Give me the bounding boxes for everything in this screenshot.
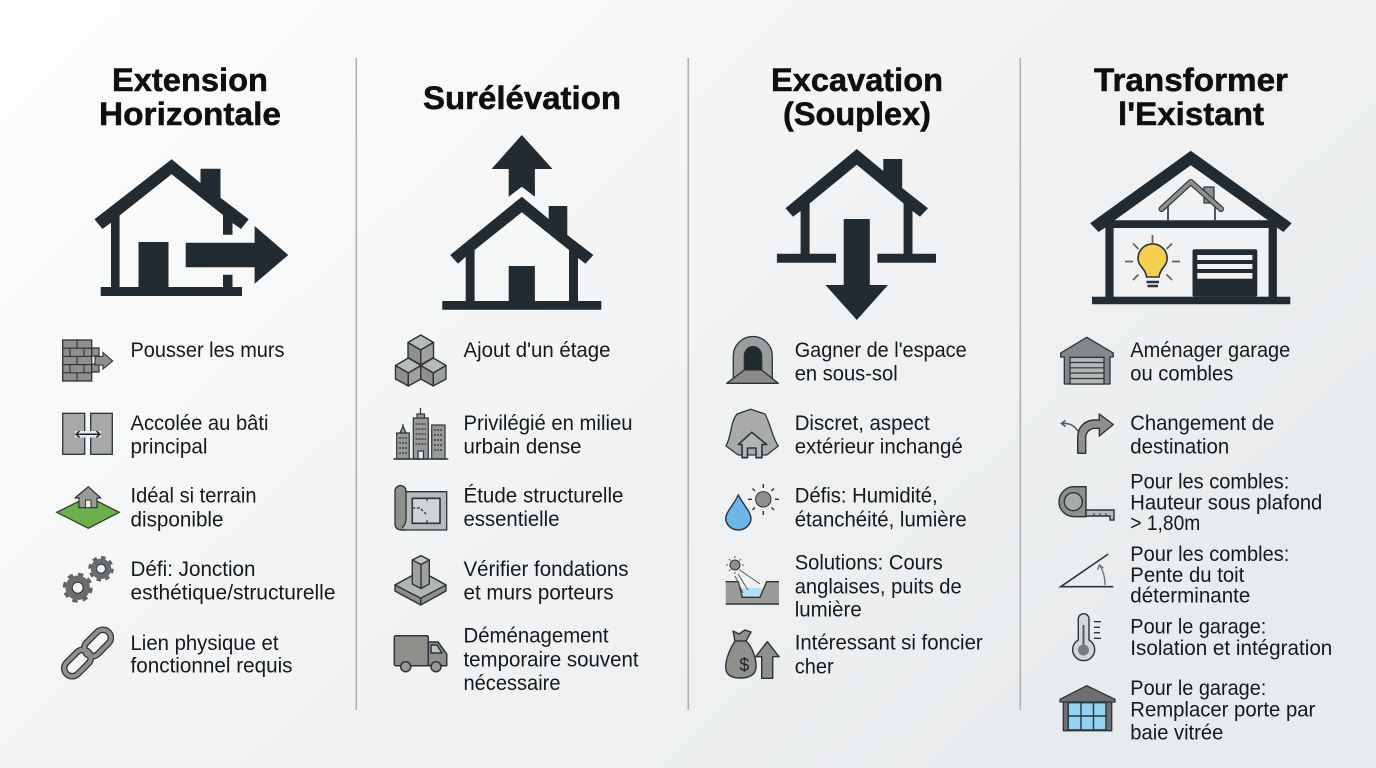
text xyxy=(1130,411,1274,458)
text: essentielle xyxy=(464,507,560,531)
text xyxy=(1130,338,1290,386)
text: étanchéité, lumière xyxy=(795,508,967,532)
heading: Transformer l'Existant xyxy=(1094,62,1288,132)
text xyxy=(1130,676,1315,744)
icon: garage xyxy=(1061,337,1113,384)
text: esthétique/structurelle xyxy=(130,580,336,604)
item: Étude structurelle essentielle xyxy=(395,483,624,531)
panel: Transformer l'Existant xyxy=(1059,62,1332,744)
text: nécessaire xyxy=(464,671,560,695)
text: Gagner de l'espace xyxy=(795,338,967,362)
icon: english court with sun xyxy=(726,556,779,604)
item: Vérifier fondations et murs porteurs xyxy=(395,556,628,605)
icon: chain links xyxy=(61,626,114,680)
icon: small attic house xyxy=(1162,182,1221,220)
text: Remplacer porte par xyxy=(1130,698,1315,722)
panel: Extension Horizontale xyxy=(57,62,335,680)
heading: Transformer l'Existant: l'Existant xyxy=(1118,96,1264,132)
icon: moving truck xyxy=(394,636,447,672)
item: Aménager garage ou combles xyxy=(1061,337,1290,386)
icon: house with up arrow xyxy=(442,135,601,310)
text: Hauteur sous plafond xyxy=(1130,490,1322,514)
text: Pour les combles: xyxy=(1130,469,1289,493)
item: Défis Humidité, étanchéité, lumière xyxy=(726,484,967,532)
icon: house with down arrow xyxy=(777,149,936,320)
house interior xyxy=(475,212,569,301)
text: en sous-sol xyxy=(795,362,898,386)
text xyxy=(795,550,962,622)
text: Pente du toit xyxy=(1130,563,1244,587)
text: Ajout d'un étage xyxy=(464,338,610,362)
icon: garage with glazed bay xyxy=(1060,686,1115,731)
icon: foundation pillar xyxy=(395,556,446,605)
item: Changement de destination xyxy=(1062,411,1274,458)
item: Privilégié en milieu urbain dense xyxy=(393,408,632,459)
icon: money bag with up arrow: $ xyxy=(739,655,749,675)
icon: house with right arrow xyxy=(94,159,288,296)
text: principal xyxy=(130,434,208,458)
text: Pour les combles: xyxy=(1130,542,1289,566)
text: > 1,80m xyxy=(1130,511,1200,535)
text: Déménagement xyxy=(464,624,609,648)
text xyxy=(464,557,628,604)
heading: Surélévation: Surélévation xyxy=(423,80,621,116)
text: et murs porteurs xyxy=(464,580,614,604)
heading: Transformer l'Existant: Transformer xyxy=(1094,62,1288,98)
panel: Surélévation xyxy=(393,80,639,695)
text: cher xyxy=(795,654,834,678)
text: Isolation et intégration xyxy=(1130,636,1332,660)
item: Accolée au bâti principal xyxy=(63,411,269,458)
icon: roof slope angle xyxy=(1061,554,1113,587)
heading: Excavation (Souplex) xyxy=(771,62,943,132)
heading: Extension Horizontale: Extension xyxy=(112,62,268,98)
item: Idéal si terrain disponible xyxy=(57,484,257,532)
text xyxy=(130,557,336,604)
text: Lien physique et xyxy=(130,631,279,655)
text: Pour le garage: xyxy=(1130,676,1266,700)
text: lumière xyxy=(795,598,862,622)
text xyxy=(464,411,632,458)
item: Pour le garage Isolation et intégration xyxy=(1073,614,1332,661)
text xyxy=(130,631,292,678)
text: Vérifier fondations xyxy=(464,557,628,581)
text xyxy=(130,484,256,532)
icon: light bulb xyxy=(1125,235,1180,286)
item: Solutions Cours anglaises, puits de lumière xyxy=(726,550,962,622)
icon: house with attic and garage xyxy=(1090,151,1292,304)
text: Défis: Humidité, xyxy=(795,484,938,508)
text: Pousser les murs xyxy=(130,338,284,362)
item: Déménagement temporaire souvent nécessaire xyxy=(394,624,639,695)
text xyxy=(795,630,983,678)
text xyxy=(795,338,967,386)
item: Gagner de l'espace en sous-sol xyxy=(727,336,967,386)
icon: turning arrow xyxy=(1062,414,1113,453)
text: baie vitrée xyxy=(1130,720,1223,744)
text: Solutions: Cours xyxy=(795,550,943,574)
icon: blueprint xyxy=(395,486,447,530)
text: Accolée au bâti xyxy=(130,411,268,435)
text: Pour le garage: xyxy=(1130,614,1266,638)
text: urbain dense xyxy=(464,434,582,458)
item: Pour les combles Hauteur sous plafond > 1,80m xyxy=(1059,469,1322,535)
text: Défi: Jonction xyxy=(130,557,256,581)
text: destination xyxy=(1130,434,1229,458)
icon: water drop and sun xyxy=(726,484,779,530)
item: Défi Jonction esthétique/structurelle xyxy=(65,557,335,604)
item: Pour le garage Remplacer porte par baie vitrée xyxy=(1060,676,1315,744)
item: Ajout d'un étage xyxy=(396,335,610,386)
heading: Extension Horizontale xyxy=(99,62,281,132)
text: Aménager garage xyxy=(1130,338,1290,362)
text xyxy=(1130,469,1322,535)
text: Privilégié en milieu xyxy=(464,411,632,435)
icon: two gears xyxy=(65,558,112,600)
text: extérieur inchangé xyxy=(795,434,963,458)
text: fonctionnel requis xyxy=(130,654,292,678)
item: Lien physique et fonctionnel requis xyxy=(61,626,292,680)
text xyxy=(795,411,963,458)
item: Pour les combles Pente du toit déterminante xyxy=(1061,542,1289,608)
item: Pousser les murs xyxy=(63,338,285,381)
item: Intéressant si foncier cher xyxy=(726,630,983,678)
text: déterminante xyxy=(1130,584,1250,608)
text: ou combles xyxy=(1130,362,1233,386)
icon: thermometer xyxy=(1073,614,1101,661)
icon: city buildings xyxy=(393,408,448,459)
text: anglaises, puits de xyxy=(795,574,962,598)
item: Discret, aspect extérieur inchangé xyxy=(726,409,963,458)
text xyxy=(130,411,268,458)
icon: house under cloak xyxy=(726,409,778,458)
icon: brick wall with arrow xyxy=(63,340,113,381)
text: Changement de xyxy=(1130,411,1274,435)
text: disponible xyxy=(130,508,224,532)
text: Étude structurelle xyxy=(464,483,624,508)
text: Discret, aspect xyxy=(795,411,930,435)
text: Idéal si terrain xyxy=(130,484,256,508)
icon: tunnel xyxy=(727,336,778,383)
icon: two adjoined panels xyxy=(63,413,112,454)
icon: stacked cubes xyxy=(396,335,446,386)
text xyxy=(1130,542,1289,608)
heading: Excavation (Souplex): (Souplex) xyxy=(783,96,931,132)
heading: Extension Horizontale: Horizontale xyxy=(99,96,281,132)
text xyxy=(464,624,639,695)
text xyxy=(1130,614,1332,660)
icon: money bag with up arrow xyxy=(726,630,779,678)
heading: Excavation (Souplex): Excavation xyxy=(771,62,943,98)
text xyxy=(795,484,967,532)
text: temporaire souvent xyxy=(464,648,639,672)
panel: Excavation (Souplex) xyxy=(726,62,983,678)
text xyxy=(464,483,624,531)
text: Intéressant si foncier xyxy=(795,630,983,654)
icon: house on green plot xyxy=(57,487,119,528)
icon: tape measure xyxy=(1059,487,1114,520)
